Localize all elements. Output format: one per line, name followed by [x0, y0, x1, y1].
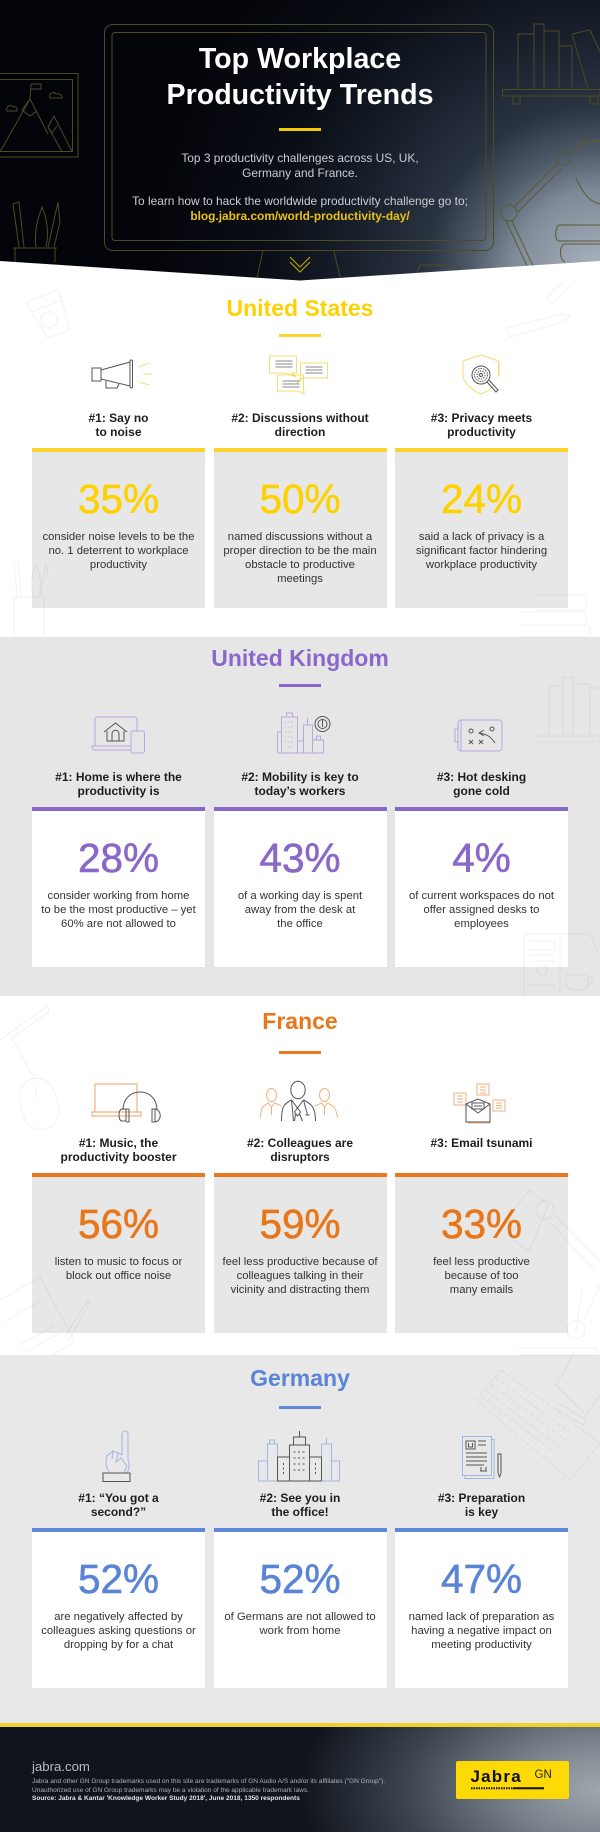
Jabra GN logo — [456, 1761, 568, 1799]
panel heading: the office! — [271, 1505, 329, 1519]
logo line — [470, 1787, 546, 1790]
statistic: 28% — [78, 834, 159, 880]
heading underline — [279, 684, 321, 687]
accent bar — [214, 1528, 386, 1532]
panel heading: gone cold — [453, 784, 510, 798]
panel heading: #2: Colleagues are — [247, 1136, 353, 1150]
description — [42, 530, 194, 570]
footer yellow rule — [0, 1723, 600, 1727]
icon: laptop and headphones — [91, 1083, 161, 1122]
icon: laptop, phone and house — [92, 716, 145, 754]
panel heading: #2: Mobility is key to — [241, 770, 359, 784]
accent bar — [32, 1173, 205, 1176]
panel heading: #2: See you in — [260, 1491, 340, 1505]
panel heading — [241, 770, 359, 798]
desk lamp — [505, 1190, 600, 1355]
section: France — [0, 996, 600, 1355]
statistic: 4% — [452, 834, 511, 880]
accent bar — [214, 448, 386, 452]
icon: office towers — [214, 1430, 386, 1490]
panel heading — [88, 411, 149, 439]
heading: United States: United States — [226, 295, 373, 321]
title: Productivity Trends — [167, 79, 433, 111]
description: colleagues asking questions or — [41, 1624, 196, 1636]
panel heading: disruptors — [270, 1150, 330, 1164]
description: of a working day is spent — [238, 890, 362, 902]
description — [41, 890, 196, 930]
pencil cup — [14, 562, 48, 637]
accent bar — [214, 807, 386, 810]
heading underline — [279, 334, 321, 337]
statistic: 56% — [78, 1200, 159, 1246]
logo GN mark: GN — [534, 1769, 552, 1781]
accent bar — [32, 448, 205, 452]
pencil — [506, 271, 580, 337]
description: feel less productive — [433, 1256, 530, 1268]
description: productivity — [90, 558, 147, 570]
icon: raised finger — [32, 1430, 205, 1490]
icon: envelope and documents — [454, 1084, 506, 1124]
statistic: 35% — [78, 476, 159, 522]
description: work from home — [260, 1624, 340, 1636]
icon: speech bubbles — [269, 356, 328, 395]
panel heading: #1: Say no — [88, 411, 149, 425]
description: having a negative impact on — [411, 1624, 552, 1636]
description: block out office noise — [66, 1270, 171, 1282]
panel: say no to noise — [32, 360, 205, 608]
stat card — [395, 452, 568, 608]
panel heading — [247, 1136, 353, 1164]
stat card — [214, 1176, 386, 1333]
stacked books — [520, 595, 590, 637]
statistic: 33% — [441, 1200, 522, 1246]
description: many emails — [450, 1284, 513, 1296]
document and coffee — [524, 934, 597, 996]
stat card — [214, 1532, 386, 1688]
bookshelf — [502, 24, 600, 104]
description: of Germans are not allowed to — [224, 1610, 376, 1622]
stat card — [395, 810, 568, 967]
stat card — [214, 452, 386, 608]
panel heading — [437, 770, 526, 798]
accent bar — [32, 1528, 205, 1532]
accent bar — [214, 1173, 386, 1176]
stat card — [32, 1532, 205, 1688]
description: offer assigned desks to — [424, 904, 539, 916]
title underline — [279, 128, 321, 131]
intro text: Top 3 productivity challenges across US, UK, — [181, 151, 419, 165]
coffee cup — [27, 290, 69, 338]
panel heading: #1: Home is where the — [55, 770, 182, 784]
panel heading: direction — [275, 425, 325, 439]
intro text — [181, 151, 419, 180]
statistic: 59% — [259, 1200, 341, 1246]
accent bar — [395, 1528, 568, 1532]
panel: music — [32, 1083, 205, 1333]
heading: Germany: Germany — [250, 1365, 350, 1391]
description: to be the most productive – yet — [41, 904, 196, 916]
statistic: 52% — [78, 1556, 159, 1602]
description: vicinity and distracting them — [231, 1284, 369, 1296]
panel: you got a second — [32, 1430, 205, 1688]
section: Germany — [0, 1355, 600, 1723]
heading underline — [279, 1050, 321, 1054]
panel heading: #3: Privacy meets — [431, 411, 532, 425]
description — [212, 1610, 388, 1638]
stat card — [32, 810, 205, 967]
statistic: 43% — [259, 834, 341, 880]
heading: France: France — [262, 1008, 338, 1034]
header panel — [0, 0, 600, 281]
description: listen to music to focus or — [55, 1256, 182, 1268]
description: feel less productive because of — [222, 1256, 378, 1268]
heading underline — [279, 1406, 321, 1408]
panel heading: productivity is — [77, 784, 160, 798]
description: named lack of preparation as — [409, 1610, 554, 1622]
panel heading: productivity — [447, 425, 516, 439]
call to action text: blog.jabra.com/world-productivity-day/ — [190, 209, 410, 223]
description — [222, 1256, 378, 1296]
panel: colleagues are disruptors — [214, 1080, 387, 1333]
panel heading: #1: “You got a — [78, 1491, 159, 1505]
chevron arrow — [290, 256, 310, 273]
description: 60% are not allowed to — [61, 918, 176, 930]
small tablet on desk — [416, 265, 462, 275]
description: employees — [454, 918, 509, 930]
title: Top Workplace — [199, 43, 401, 75]
white wedge — [0, 261, 600, 281]
panel: privacy meets productivity — [395, 354, 568, 608]
description — [393, 1610, 570, 1652]
panel heading: #3: Preparation — [438, 1491, 525, 1505]
website address: jabra.com — [32, 1759, 90, 1774]
description: workplace productivity — [426, 558, 537, 570]
decorative office line art — [0, 24, 600, 278]
description: are negatively affected by — [54, 1610, 183, 1622]
description: proper direction to be the main — [223, 544, 377, 556]
mouse and cable — [0, 1006, 63, 1134]
framed mountain picture — [0, 74, 78, 157]
icon: shield and fingerprint — [462, 354, 500, 394]
statistic: 47% — [441, 1556, 522, 1602]
icon: three colleagues — [260, 1080, 338, 1122]
icon: document and pen — [395, 1430, 568, 1490]
description: consider working from home — [48, 890, 189, 902]
panel heading — [55, 770, 182, 798]
trademark notice line 1: Jabra and other GN Group trademarks used on this site are trademarks of GN Audio A/S and/or its affiliates ("GN Group"). — [32, 1778, 385, 1785]
footer panel — [0, 1727, 600, 1832]
panel heading — [389, 1491, 574, 1519]
description: colleagues talking in their — [237, 1270, 363, 1282]
pencil cup — [13, 202, 60, 262]
panel: hot desking gone cold — [395, 720, 568, 967]
panel heading: today’s workers — [255, 784, 345, 798]
statistic: 50% — [259, 476, 341, 522]
panel: discussions without direction — [214, 356, 387, 608]
description — [416, 530, 547, 570]
description: said a lack of privacy is a — [419, 530, 544, 542]
description — [409, 890, 554, 930]
stat card — [32, 1176, 205, 1333]
icon: city and clock — [277, 712, 330, 754]
call to action text: To learn how to hack the worldwide productivity challenge go to; — [132, 194, 468, 208]
panel: mobility is key — [214, 712, 387, 967]
description: named discussions without a — [228, 530, 372, 542]
description: of current workspaces do not — [409, 890, 554, 902]
section: United States — [0, 261, 600, 637]
stat card — [32, 452, 205, 608]
source line: Source: Jabra & Kantar 'Knowledge Worker Study 2018', June 2018, 1350 respondents — [32, 1795, 300, 1802]
panel heading: is key — [465, 1505, 498, 1519]
panel heading: #2: Discussions without — [231, 411, 369, 425]
statistic: 52% — [259, 1556, 341, 1602]
heading: United Kingdom: United Kingdom — [211, 645, 389, 671]
description: because of too — [444, 1270, 519, 1282]
panel: preparation is key — [395, 1430, 568, 1688]
desk lamp — [501, 140, 600, 266]
description: meetings — [277, 572, 323, 584]
description — [223, 530, 377, 584]
icon: megaphone — [92, 360, 152, 388]
accent bar — [395, 448, 568, 452]
panel heading: #3: Hot desking — [437, 770, 526, 784]
section: United Kingdom — [0, 637, 600, 996]
description: significant factor hindering — [416, 544, 547, 556]
panel: see you in the office — [214, 1430, 386, 1688]
bookshelf — [536, 677, 600, 742]
logo wordmark: Jabra — [470, 1767, 522, 1786]
call to action text — [132, 194, 468, 223]
panel: email tsunami — [395, 1084, 568, 1333]
panel heading: #1: Music, the — [79, 1136, 158, 1150]
description — [238, 890, 362, 930]
title — [167, 43, 433, 111]
description: dropping by for a chat — [64, 1638, 173, 1650]
panel heading: second?” — [91, 1505, 146, 1519]
accent bar — [32, 807, 205, 810]
panel heading — [231, 411, 369, 439]
description: the office — [277, 918, 323, 930]
description — [393, 1254, 570, 1296]
stat card — [395, 1176, 568, 1333]
panel heading: productivity booster — [60, 1150, 176, 1164]
stat card — [214, 810, 386, 967]
panel heading: #3: Email tsunami — [430, 1136, 533, 1150]
panel heading: to noise — [95, 425, 142, 439]
accent bar — [395, 1173, 568, 1176]
description: away from the desk at — [245, 904, 355, 916]
description — [30, 1610, 207, 1652]
description: consider noise levels to be the — [42, 530, 194, 542]
monitor frame — [104, 24, 494, 277]
icon: tactics board — [454, 720, 502, 752]
accent bar — [395, 807, 568, 810]
panel: home is where the productivity is — [32, 716, 205, 967]
description: no. 1 deterrent to workplace — [48, 544, 189, 556]
panel heading — [430, 411, 532, 439]
panel heading — [26, 1491, 211, 1519]
description — [55, 1256, 182, 1282]
stat card — [395, 1532, 568, 1688]
description: obstacle to productive — [245, 558, 355, 570]
keyboard and phone — [476, 1350, 600, 1480]
intro text: Germany and France. — [242, 166, 358, 180]
notes and pen — [0, 1277, 90, 1355]
description: meeting productivity — [431, 1638, 532, 1650]
panel heading — [208, 1491, 392, 1519]
trademark notice line 2: Unauthorized use of GN Group trademarks may be a violation of the applicable trademark laws. — [32, 1786, 309, 1794]
statistic: 24% — [441, 476, 522, 522]
panel heading — [60, 1136, 176, 1164]
